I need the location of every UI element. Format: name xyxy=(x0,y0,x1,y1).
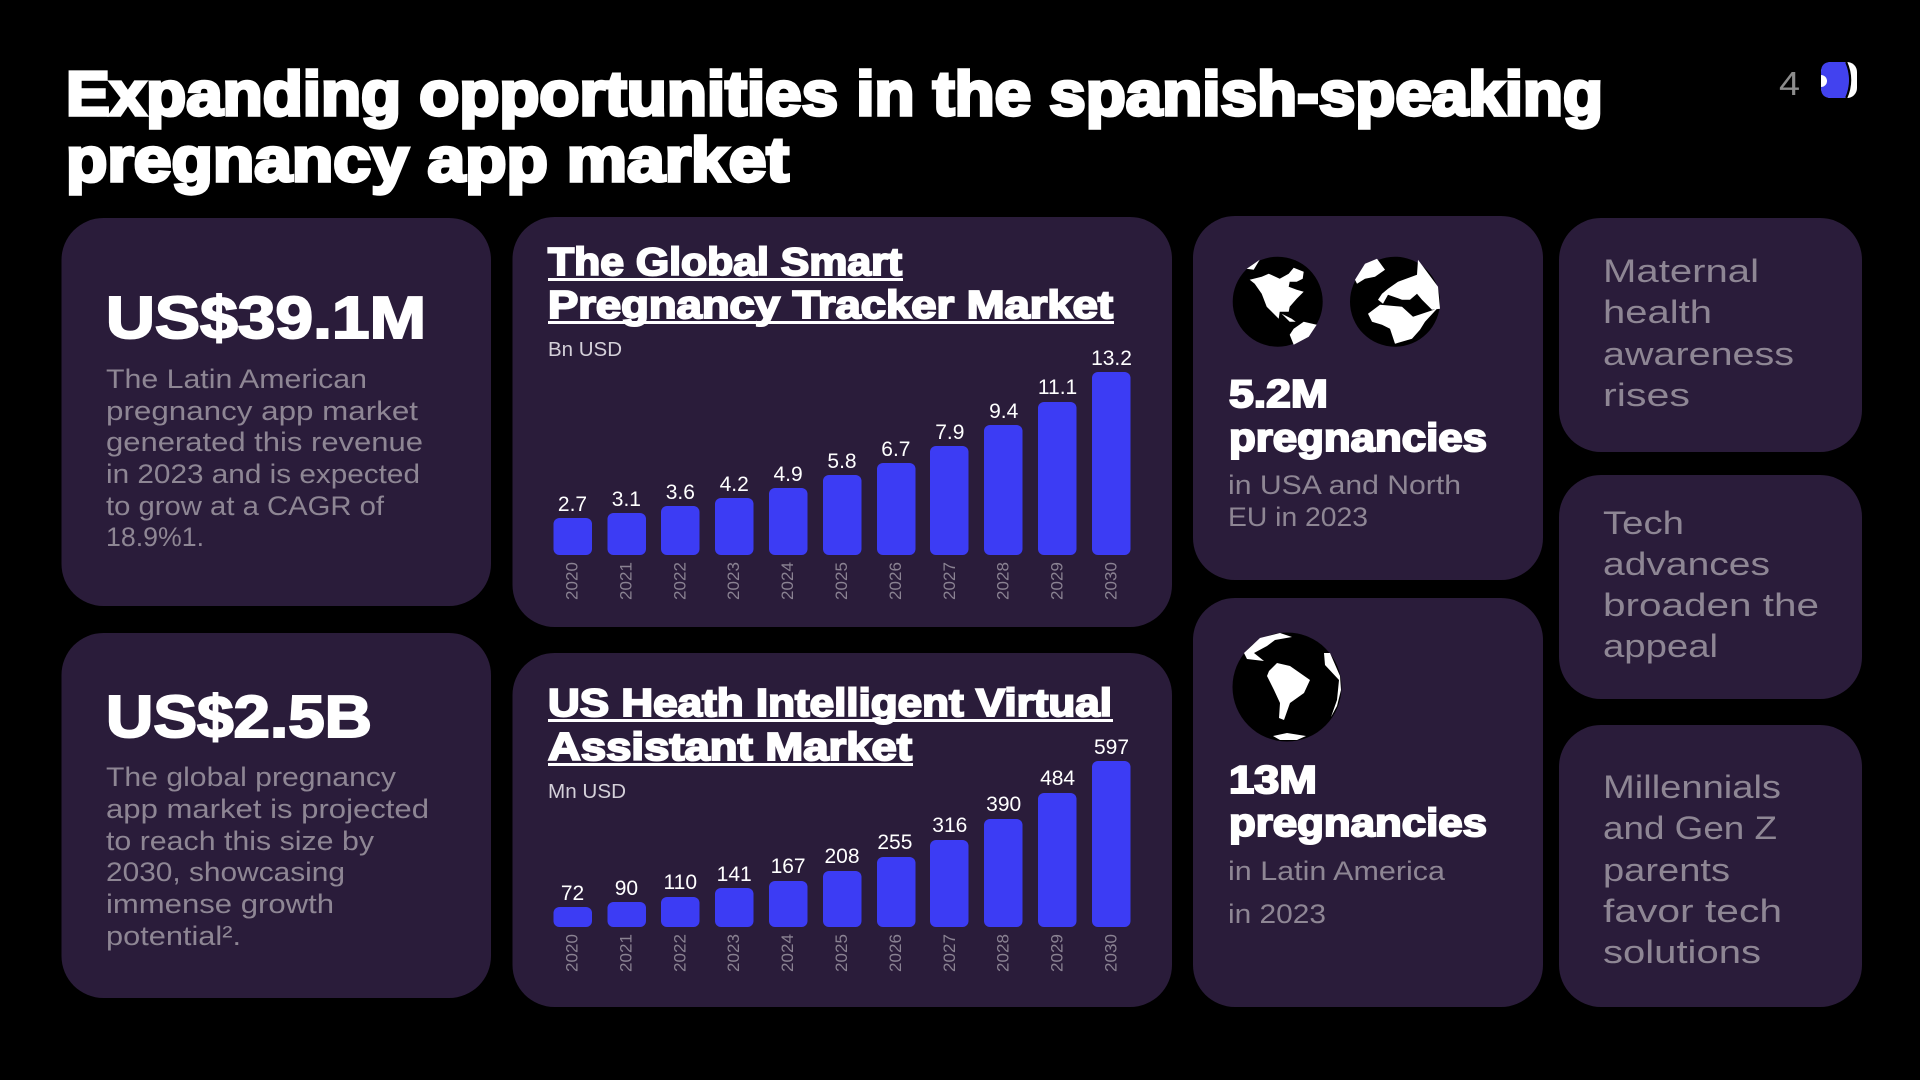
panel: Global Smart Pregnancy Tracker Market xyxy=(512,217,1172,627)
title xyxy=(66,60,1603,195)
bar chart: 255 xyxy=(877,831,912,854)
text: driver: health xyxy=(1603,294,1712,330)
bar chart: 9.4 xyxy=(989,400,1019,423)
text: region description: in USA and North xyxy=(1228,470,1461,500)
unit label: Mn USD xyxy=(548,781,626,803)
bar chart: 90 xyxy=(615,877,638,900)
text: global market description: to reach this size by xyxy=(106,826,375,856)
chart heading: Assistant Market xyxy=(548,726,912,769)
text: driver: awareness xyxy=(1603,336,1794,372)
text: global market description xyxy=(106,762,429,951)
panel: Latin America pregnancies xyxy=(1193,598,1543,1007)
text: driver xyxy=(1603,505,1819,664)
icon: globe Americas xyxy=(1233,257,1323,347)
bar chart: 11.1 xyxy=(1038,376,1077,399)
bar chart: 2022 xyxy=(670,934,689,972)
text: Latin American description xyxy=(106,364,423,552)
bar chart: 2020 xyxy=(562,934,582,972)
panel: Millennials and Gen Z xyxy=(1559,725,1862,1007)
bar chart: 4.9 xyxy=(773,463,803,486)
bar chart: 2023 xyxy=(724,562,743,600)
chart heading xyxy=(548,682,1113,769)
text: region description: in 2023 xyxy=(1228,899,1326,929)
bar chart: 2027 xyxy=(940,562,959,600)
title: Expanding opportunities in the spanish-speaking xyxy=(66,60,1603,129)
text: global market description: The global pregnancy xyxy=(106,762,397,792)
bar chart: 2.7 xyxy=(558,493,587,516)
panel: USA and North EU pregnancies xyxy=(1193,216,1543,580)
stat: 13M pregnancies: 13M xyxy=(1229,759,1317,802)
text: driver xyxy=(1603,769,1782,970)
bar chart: 208 xyxy=(824,845,860,868)
bar chart: 4.2 xyxy=(720,473,749,496)
text: Latin American description: pregnancy app market xyxy=(106,396,419,426)
bar chart: 2021 xyxy=(616,562,635,600)
text: driver: advances xyxy=(1603,546,1770,582)
stat: 5.2M pregnancies: 5.2M xyxy=(1229,373,1328,416)
chart heading: The Global Smart xyxy=(548,241,902,284)
bar chart: 167 xyxy=(771,855,806,878)
text: Latin American description: The Latin American xyxy=(106,364,367,394)
stat: 13M pregnancies xyxy=(1229,759,1487,845)
bar chart: 2021 xyxy=(616,934,635,972)
bar chart: 2028 xyxy=(994,562,1013,600)
text: driver: Millennials xyxy=(1603,769,1781,805)
bar chart: 316 xyxy=(932,814,967,837)
text: driver: favor tech xyxy=(1603,893,1782,929)
text: global market description: immense growth xyxy=(106,889,334,919)
bar chart: 2026 xyxy=(886,562,905,600)
bar chart: 2026 xyxy=(886,934,905,972)
text: Latin American description: to grow at a CAGR of xyxy=(106,491,385,521)
bar chart: 2029 xyxy=(1048,562,1067,600)
text: driver: parents xyxy=(1603,852,1730,888)
stat: US$2.5B: US$2.5B xyxy=(106,684,372,750)
text: driver: Tech xyxy=(1603,505,1684,541)
icon: globe Europe and Africa xyxy=(1350,257,1440,347)
bar chart: 2029 xyxy=(1048,934,1067,972)
bar chart: 484 xyxy=(1040,767,1075,790)
bar chart: 2020 xyxy=(562,562,582,600)
text: global market description: app market is projected xyxy=(106,794,429,824)
bar chart: 2028 xyxy=(994,934,1013,972)
icon: globe South America xyxy=(1232,632,1342,742)
text: driver: broaden the xyxy=(1603,587,1819,623)
stat: 13M pregnancies: pregnancies xyxy=(1229,802,1487,845)
bar chart: 7.9 xyxy=(935,421,964,444)
panel: US Health Intelligent Virtual Assistant Market xyxy=(512,653,1172,1007)
bar chart: 110 xyxy=(664,871,697,894)
text: global market description: 2030, showcasing xyxy=(106,857,345,887)
text: Latin American description: 18.9%1. xyxy=(106,522,204,552)
bar chart: 2030 xyxy=(1102,934,1120,972)
stat: 5.2M pregnancies: pregnancies xyxy=(1229,417,1487,460)
bar chart: 2022 xyxy=(670,562,689,600)
bar chart: 2024 xyxy=(778,934,797,972)
bar chart: 5.8 xyxy=(827,450,857,473)
bar chart: 3.6 xyxy=(666,481,695,504)
text: region description xyxy=(1228,856,1446,929)
text: Latin American description: generated this revenue xyxy=(106,427,423,457)
text: Latin American description: in 2023 and is expected xyxy=(106,459,420,489)
bar chart: 2025 xyxy=(832,934,851,972)
text: driver: Maternal xyxy=(1603,253,1759,289)
text: driver xyxy=(1603,253,1794,413)
bar chart: 2027 xyxy=(940,934,959,972)
bar chart: 390 xyxy=(986,793,1021,816)
panel: Tech advances xyxy=(1559,475,1862,699)
title: pregnancy app market xyxy=(66,126,789,195)
panel: Latin American revenue xyxy=(62,218,491,606)
panel: Maternal health awareness xyxy=(1559,218,1862,452)
chart heading xyxy=(548,241,1114,327)
bar chart xyxy=(554,736,1130,972)
text: driver: appeal xyxy=(1603,628,1718,664)
bar chart: 72 xyxy=(561,882,584,905)
page number: 4 xyxy=(1779,65,1800,102)
panel: global app market xyxy=(62,633,491,998)
text: driver: and Gen Z xyxy=(1603,810,1777,846)
bar chart xyxy=(554,347,1132,600)
bar chart: 13.2 xyxy=(1091,347,1132,370)
bar chart: 6.7 xyxy=(881,438,911,461)
bar chart: 3.1 xyxy=(612,488,641,511)
bar chart: 2030 xyxy=(1102,562,1120,600)
bar chart: 2023 xyxy=(724,934,743,972)
stat: 5.2M pregnancies xyxy=(1229,373,1487,460)
unit label: Bn USD xyxy=(548,339,622,361)
text: driver: rises xyxy=(1603,377,1690,413)
bar chart: 597 xyxy=(1094,736,1129,759)
text: region description: EU in 2023 xyxy=(1228,502,1368,532)
bar chart: 141 xyxy=(717,863,752,886)
chart heading: Pregnancy Tracker Market xyxy=(548,284,1113,327)
text: driver: solutions xyxy=(1603,934,1761,970)
text: region description: in Latin America xyxy=(1228,856,1446,886)
text: region description xyxy=(1228,470,1461,532)
stat: US$39.1M: US$39.1M xyxy=(106,285,426,351)
bar chart: 2025 xyxy=(832,562,851,600)
bar chart: 2024 xyxy=(778,562,797,600)
chart heading: US Heath Intelligent Virtual xyxy=(548,682,1112,725)
text: global market description: potential². xyxy=(106,921,241,951)
icon: logo xyxy=(1821,62,1857,98)
